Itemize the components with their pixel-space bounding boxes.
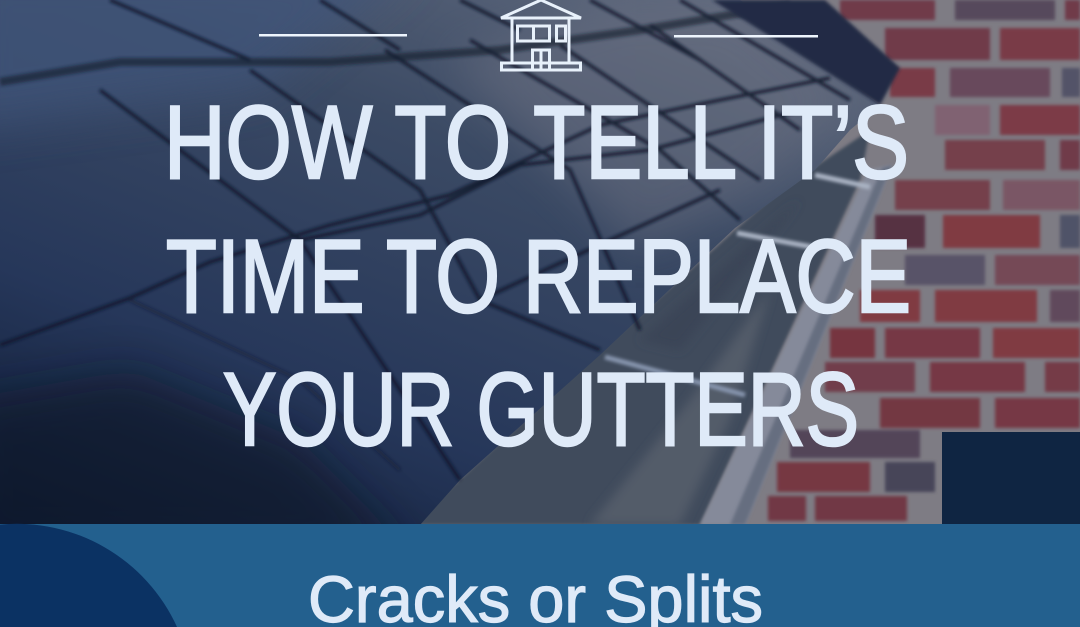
title: HOW TO TELL IT’S	[164, 85, 909, 201]
shingle seams	[0, 0, 850, 480]
gutter metal edge	[700, 165, 892, 525]
gutter straps	[605, 175, 870, 395]
decorative line left	[259, 34, 407, 36]
brick wall	[768, 0, 1080, 521]
title	[164, 85, 911, 468]
title: TIME TO REPLACE	[166, 219, 911, 335]
decorative circle	[0, 524, 177, 627]
icon: house	[501, 0, 581, 70]
bottom panel	[0, 524, 1080, 627]
title: YOUR GUTTERS	[223, 352, 859, 468]
dark fascia	[712, 0, 900, 105]
decorative line right	[674, 35, 818, 38]
gutter interior	[410, 130, 870, 525]
roof shingles	[0, 0, 878, 524]
vent box	[942, 432, 1080, 525]
